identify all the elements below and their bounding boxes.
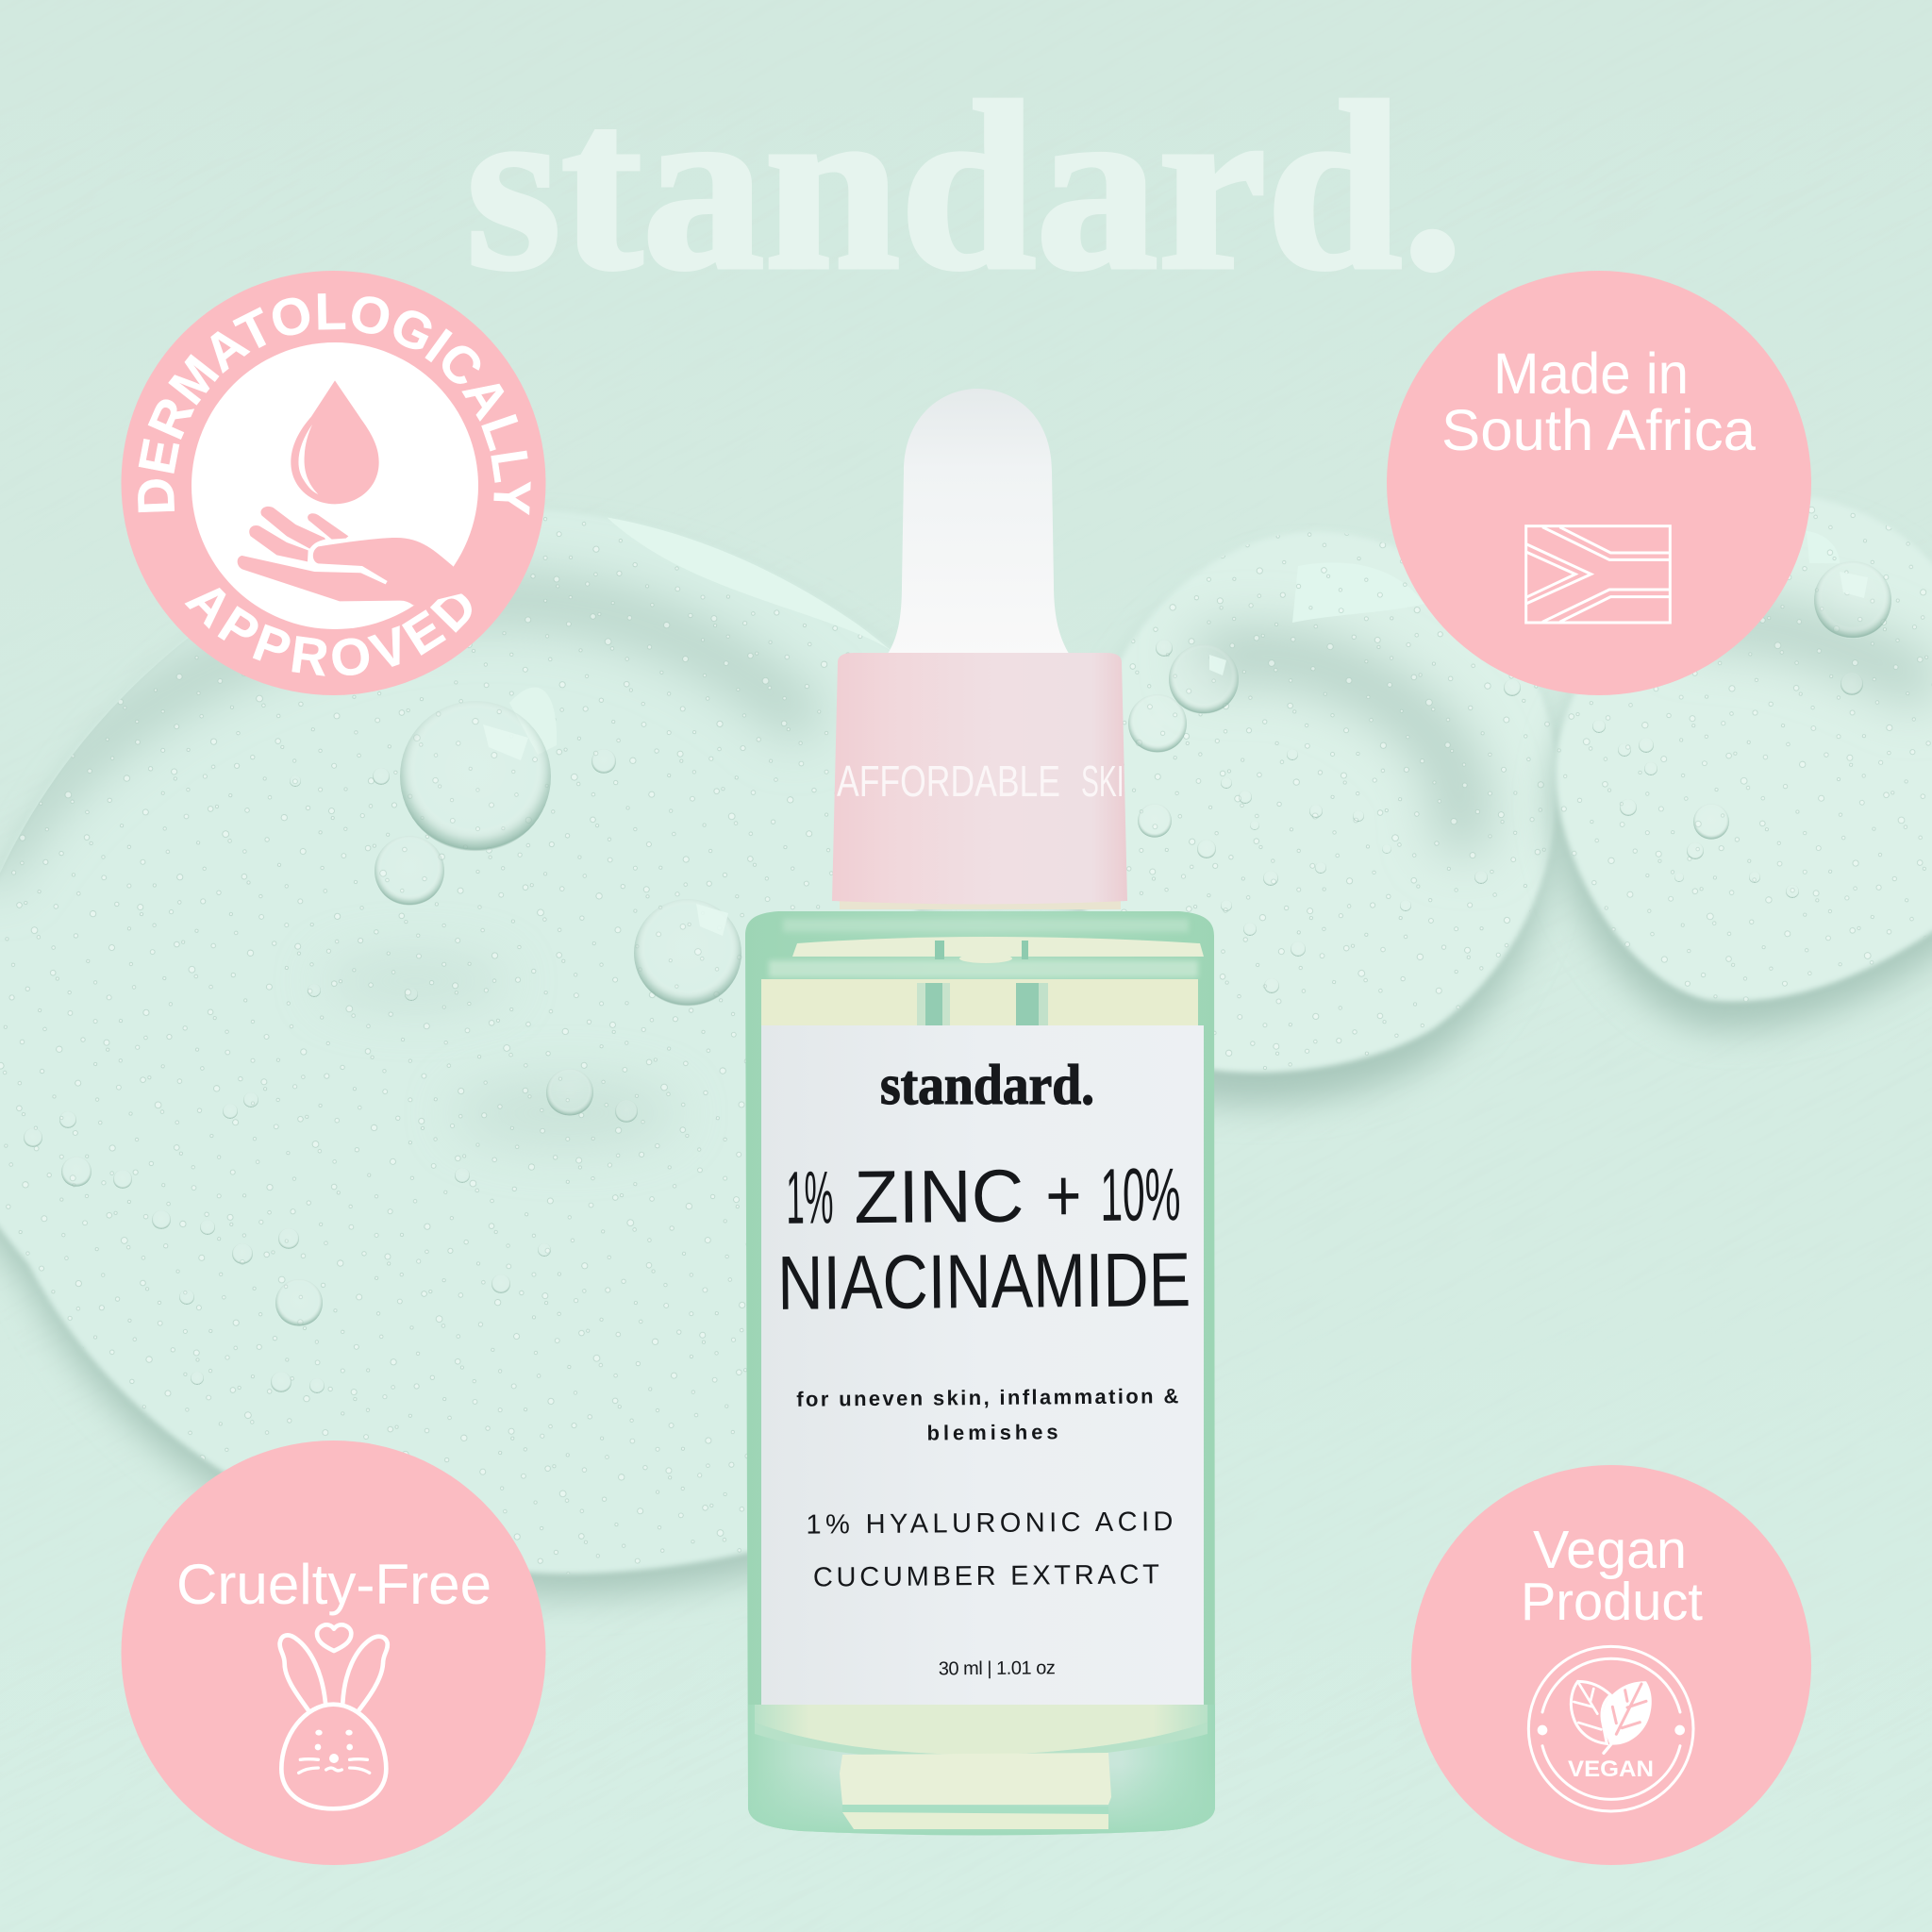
serum blob: far right [1552,491,1932,1030]
text: south africa: South Africa [1441,398,1756,462]
badge: cruelty-free [121,1441,545,1865]
badge: vegan product [1411,1465,1811,1865]
base of bottle [748,1705,1215,1836]
cap text: SKIN [1081,757,1143,806]
label ingredient: hyaluronic acid: 1% HYALURONIC ACID [806,1507,1174,1541]
curved text: approved: APPROVED [185,588,472,676]
label volume: 30 ml | 1.01 oz [939,1657,1056,1679]
label headline: zinc: ZINC [854,1154,1024,1239]
label headline: zinc [786,1152,1181,1240]
serum blob: left [0,509,943,1596]
bubble highlights [483,572,1868,936]
label headline: zinc: 10% [1100,1152,1181,1237]
label headline: niacinamide: NIACINAMIDE [777,1238,1191,1326]
curved text: dermatologically: DERMATOLOGICALLY [138,293,531,515]
label description: for uneven skin, inflammation & [796,1384,1178,1411]
text: cruelty-free: Cruelty-Free [176,1553,491,1616]
cap text [837,766,1122,796]
cap text: AFFORDABLE [837,757,1060,806]
icon: rabbit with heart [280,1624,388,1808]
text: vegan seal: VEGAN [1568,1757,1654,1782]
text: product: Product [1521,1572,1703,1632]
dropper bulb [886,389,1071,657]
label text lines [776,1152,1194,1681]
title: standard.: standard. [466,54,1463,320]
serum bubbles [24,561,1891,1393]
text: made in: Made in [1493,341,1689,406]
label headline: zinc: + [1045,1153,1082,1237]
liquid with dropper tube [761,979,1198,1026]
glass rim highlights [769,919,1204,977]
glass body [745,911,1215,1836]
icon: droplet over open hand [238,380,472,606]
label description second line: blemishes [926,1420,1058,1445]
text: vegan: Vegan [1533,1520,1687,1580]
pink cap [832,653,1143,909]
badge: dermatologically approved [121,271,545,695]
badge: made in south africa [1387,271,1811,695]
label ingredient: cucumber extract: CUCUMBER EXTRACT [813,1559,1159,1593]
icon: south african flag outline [1526,526,1670,623]
product label [761,1025,1204,1705]
product: dropper bottle [745,389,1215,1836]
serum blob: centre right [1081,528,1566,1105]
icon: vegan seal with leaves [1528,1646,1693,1811]
label headline: zinc: 1% [786,1155,834,1240]
label brand: standard. [880,1054,1094,1116]
